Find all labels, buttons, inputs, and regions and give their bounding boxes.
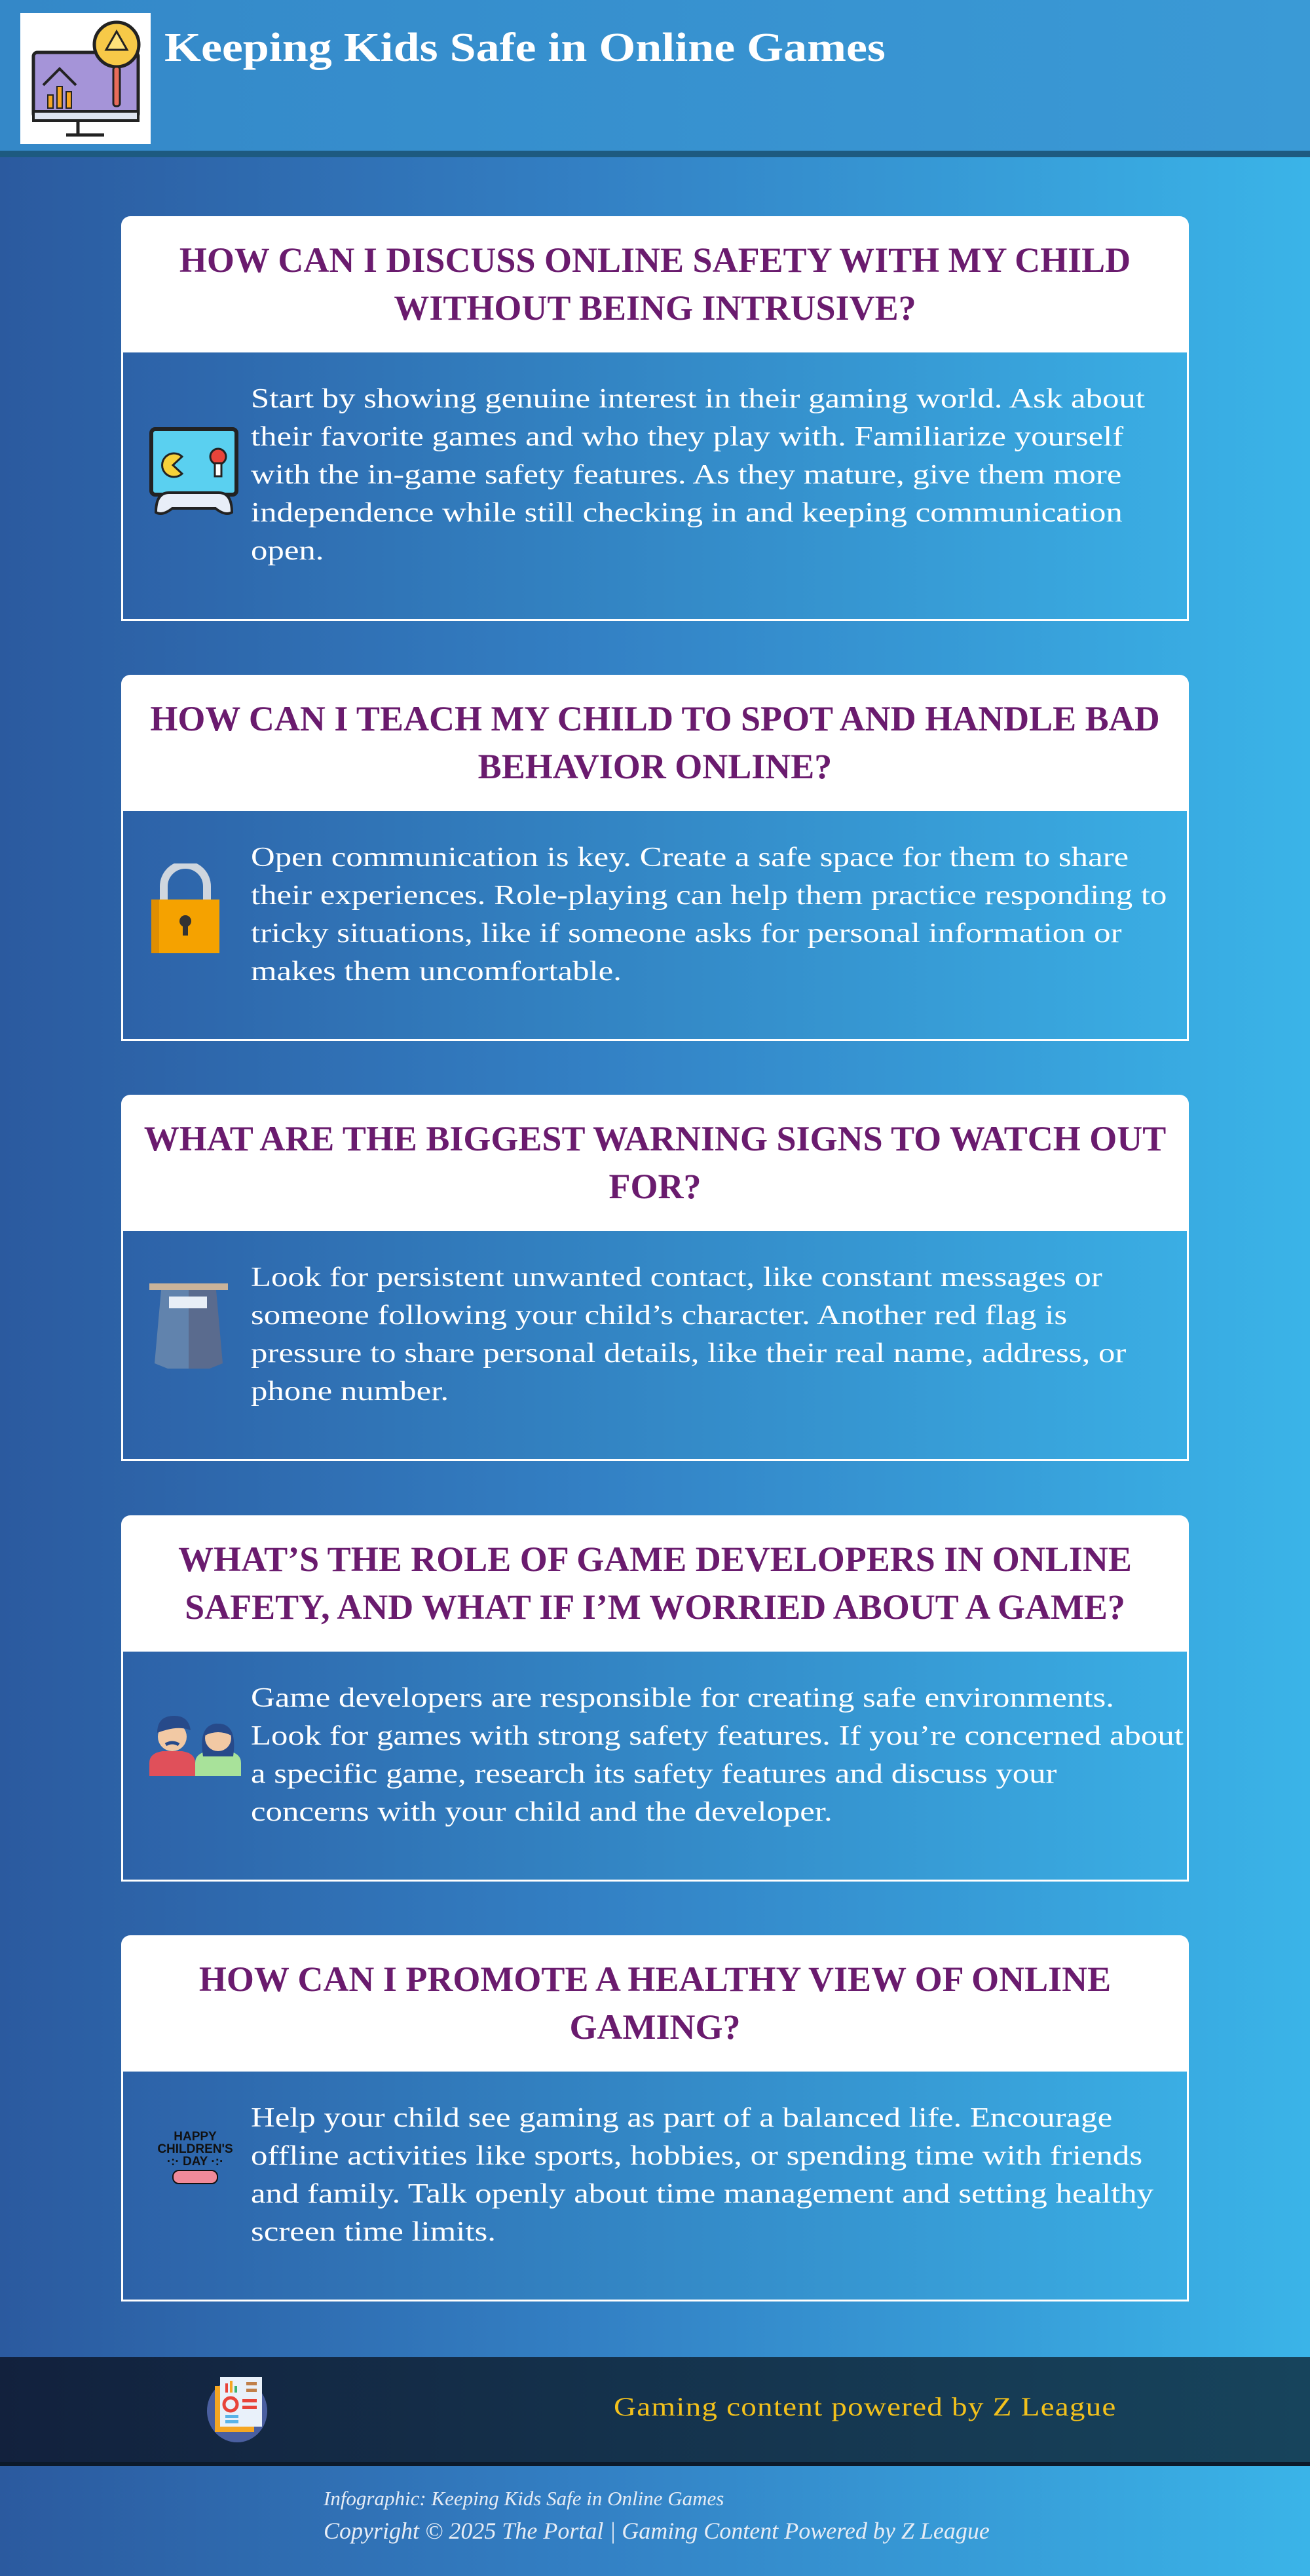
body text: someone following your child’s character. Another red flag is <box>251 1300 1067 1331</box>
body text <box>251 1262 1126 1407</box>
body text: offline activities like sports, hobbies, or spending time with friends <box>251 2141 1142 2171</box>
title: Keeping Kids Safe in Online Games <box>164 26 886 70</box>
heading <box>121 1095 1189 1231</box>
body text: their favorite games and who they play with. Familiarize yourself <box>251 422 1123 452</box>
body text: tricky situations, like if someone asks for personal information or <box>251 919 1122 949</box>
icon: game screen and controller <box>149 427 238 515</box>
heading <box>121 1935 1189 2072</box>
heading <box>121 216 1189 352</box>
body text: Look for games with strong safety features. If you’re concerned about <box>251 1721 1184 1751</box>
icon: report document <box>207 2377 267 2442</box>
heading: WHAT’S THE ROLE OF GAME DEVELOPERS IN ONLINE <box>178 1540 1132 1579</box>
heading: FOR? <box>608 1167 701 1206</box>
copyright line: Copyright © 2025 The Portal | Gaming Content Powered by Z League <box>324 2518 990 2544</box>
heading: SAFETY, AND WHAT IF I’M WORRIED ABOUT A GAME? <box>185 1587 1125 1627</box>
header bar <box>0 0 1310 157</box>
body text: a specific game, research its safety features and discuss your <box>251 1759 1057 1789</box>
body text <box>251 843 1167 987</box>
icon: happy children's day <box>157 2130 233 2184</box>
panel: bad behavior <box>121 675 1189 1041</box>
heading: HOW CAN I PROMOTE A HEALTHY VIEW OF ONLINE <box>199 1960 1111 1999</box>
heading: WHAT ARE THE BIGGEST WARNING SIGNS TO WATCH OUT <box>144 1119 1166 1158</box>
icon: apron <box>149 1283 228 1369</box>
icon: happy children's day: ·:· DAY ·:· <box>167 2155 223 2169</box>
panel: healthy view <box>121 1935 1189 2301</box>
heading: WITHOUT BEING INTRUSIVE? <box>394 288 916 328</box>
heading: HOW CAN I DISCUSS ONLINE SAFETY WITH MY CHILD <box>179 240 1131 280</box>
icon: happy children's day: HAPPY <box>174 2130 217 2144</box>
heading <box>121 1515 1189 1652</box>
footer text: Gaming content powered by Z League <box>614 2392 1117 2421</box>
heading: BEHAVIOR ONLINE? <box>478 747 832 786</box>
heading: HOW CAN I TEACH MY CHILD TO SPOT AND HANDLE BAD <box>150 699 1160 738</box>
heading <box>121 675 1189 811</box>
body text: Look for persistent unwanted contact, like constant messages or <box>251 1262 1102 1293</box>
body text: pressure to share personal details, like their real name, address, or <box>251 1338 1126 1369</box>
icon: happy children's day: CHILDREN'S <box>157 2142 233 2156</box>
body text: with the in-game safety features. As they mature, give them more <box>251 460 1121 490</box>
body text: Open communication is key. Create a safe space for them to share <box>251 843 1129 873</box>
body text: independence while still checking in and keeping communication <box>251 498 1123 528</box>
body text: their experiences. Role-playing can help them practice responding to <box>251 881 1167 911</box>
credit line: Infographic: Keeping Kids Safe in Online Games <box>324 2487 724 2510</box>
body text: phone number. <box>251 1376 449 1407</box>
panel: discuss online safety <box>121 216 1189 621</box>
body text: Help your child see gaming as part of a balanced life. Encourage <box>251 2103 1112 2133</box>
icon: monitor with warning magnifier logo <box>20 13 151 144</box>
body text: concerns with your child and the developer. <box>251 1797 833 1827</box>
body text <box>251 2103 1153 2247</box>
body text <box>251 1683 1184 1827</box>
body text: Game developers are responsible for creating safe environments. <box>251 1683 1114 1713</box>
body text: Start by showing genuine interest in their gaming world. Ask about <box>251 384 1145 414</box>
heading: GAMING? <box>570 2007 740 2047</box>
body text: and family. Talk openly about time management and setting healthy <box>251 2179 1153 2209</box>
panel: warning signs <box>121 1095 1189 1461</box>
body text: makes them uncomfortable. <box>251 957 622 987</box>
body text: open. <box>251 536 324 566</box>
footer band <box>0 2357 1310 2466</box>
panel: game developers <box>121 1515 1189 1882</box>
icon: parents <box>149 1716 241 1776</box>
icon: padlock <box>151 863 219 953</box>
body text <box>251 384 1145 566</box>
body text: screen time limits. <box>251 2217 496 2247</box>
